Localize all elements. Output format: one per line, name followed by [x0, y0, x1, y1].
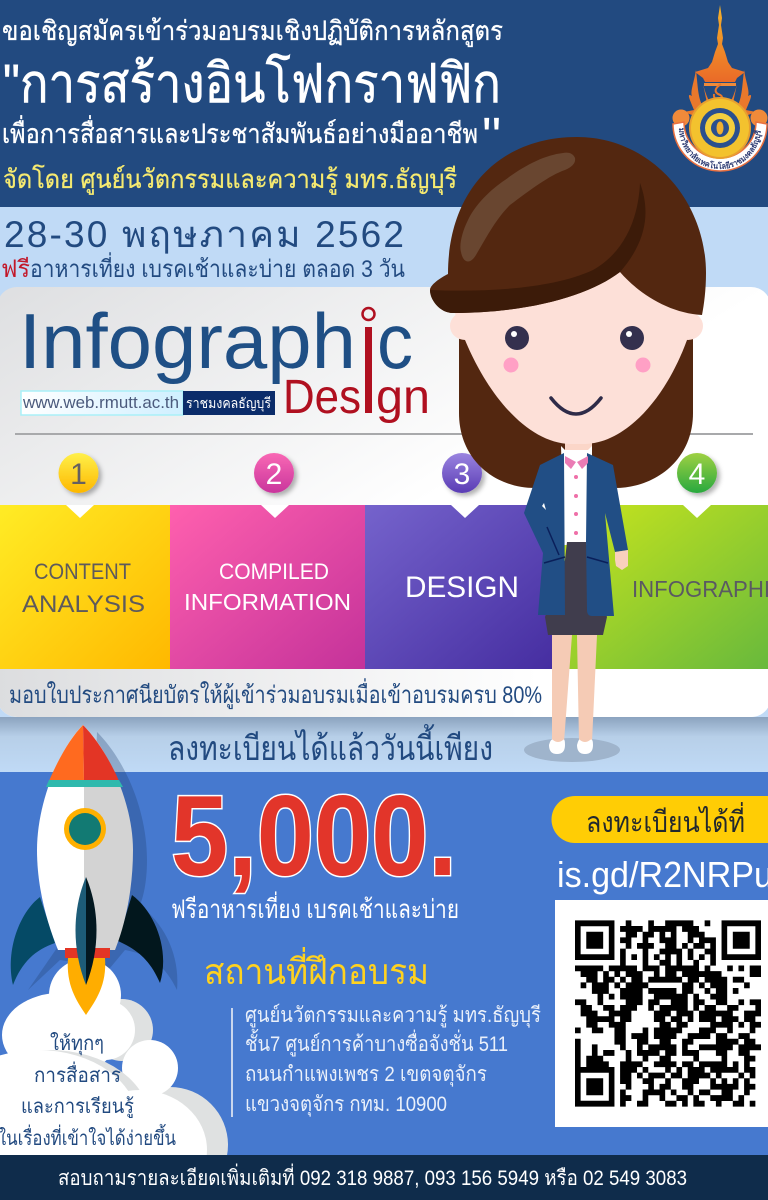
buttons [574, 475, 578, 535]
footer bar: สอบถามรายละเอียดเพิ่มเติมที่ 092 318 9887, 093 156 5949 หรือ 02 549 3083 [58, 1163, 687, 1190]
logo text: Infographic Design: gn [376, 371, 430, 424]
rocket body [37, 725, 133, 950]
illustration: woman character [430, 137, 706, 762]
hand [615, 550, 628, 570]
neck and shirt [561, 436, 592, 545]
cloud text: และการเรียนรู้ [21, 1096, 134, 1119]
panel: white card with process steps [0, 287, 768, 717]
logo: university emblem [672, 5, 768, 172]
header panel [0, 0, 768, 207]
badge 4 [677, 453, 717, 493]
venue address: แขวงจตุจักร กทม. 10900 [245, 1093, 447, 1117]
cloud text [0, 1032, 176, 1150]
title: course name: "การสร้างอินโฟกราฟฟิก [3, 53, 501, 114]
cloud text: การสื่อสาร [34, 1061, 121, 1087]
step 2: compiled information: INFORMATION [184, 589, 351, 615]
jacket [524, 453, 628, 616]
fringe shadow [430, 183, 645, 313]
price note: ฟรีอาหารเที่ยง เบรคเช้าและบ่าย [171, 891, 459, 924]
free meals line: ฟรี [1, 256, 30, 283]
rocket shadow [28, 732, 177, 990]
step 4: infographic [557, 453, 768, 669]
price: 5,000. [171, 773, 457, 900]
cheeks [504, 358, 650, 372]
website badge: www.web.rmutt.ac.th [22, 393, 179, 412]
logo text: Infographic Design [19, 297, 430, 424]
skirt [545, 542, 607, 635]
heading: invitation line: ขอเชิญสมัครเข้าร่วมอบรมเชิงปฏิบัติการหลักสูตร [2, 16, 503, 47]
badge 4: 4 [689, 458, 705, 491]
badge 2: 2 [266, 458, 282, 491]
registration heading: ลงทะเบียนได้แล้ววันนี้เพียง [168, 724, 493, 768]
flame [68, 958, 105, 1015]
venue heading: สถานที่ฝึกอบรม [204, 947, 429, 992]
badge 1: 1 [70, 458, 87, 491]
rocket window [64, 808, 106, 850]
step 1: content analysis: ANALYSIS [22, 591, 145, 618]
subtitle: course purpose: เพื่อการสื่อสารและประชาสัมพันธ์อย่างมืออาชีพ [2, 115, 478, 149]
venue address: ชั้น7 ศูนย์การค้าบางซื่อจังชั่น 511 [245, 1029, 508, 1057]
free meals line: อาหารเที่ยง เบรคเช้าและบ่าย ตลอด 3 วัน [30, 252, 405, 283]
smoke cloud [0, 959, 228, 1200]
registration pill: ลงทะเบียนได้ที่ [586, 802, 745, 839]
badge 3 [442, 453, 482, 493]
venue address: ศูนย์นวัตกรรมและความรู้ มทร.ธัญบุรี [245, 1003, 541, 1028]
date heading: 28-30 พฤษภาคม 2562 [4, 214, 404, 255]
logo text: Infographic Design: Infograph [19, 297, 356, 385]
certificate note: มอบใบประกาศนียบัตรให้ผู้เข้าร่วมอบรมเมื่อเข้าอบรมครบ 80% [9, 678, 542, 710]
logo text: Infographic Design: c [377, 297, 413, 385]
back hair [459, 320, 693, 488]
step 1: content analysis: CONTENT [34, 559, 131, 584]
website badge [21, 391, 275, 415]
organizer line: จัดโดย ศูนย์นวัตกรรมและความรู้ มทร.ธัญบุรี [3, 164, 457, 195]
cloud text: ในเรื่องที่เข้าใจได้ง่ายขึ้น [0, 1124, 176, 1150]
step 3: design: DESIGN [405, 571, 519, 604]
closing quotation mark: " [482, 107, 501, 167]
venue address: ถนนกำแพงเพชร 2 เขตจตุจักร [245, 1063, 487, 1087]
shoes [549, 740, 593, 754]
legs [552, 635, 597, 742]
logo: university emblem: มหาวิทยาลัยเทคโนโลยีราชมงคลธัญบุรี [678, 128, 763, 170]
smile [551, 398, 601, 414]
illustration: rocket and smoke cloud [0, 725, 228, 1200]
ears [450, 312, 703, 340]
center fin [76, 877, 96, 985]
collar [565, 456, 588, 469]
website badge: ราชมงคลธัญบุรี [186, 395, 271, 412]
footer bar [0, 1155, 768, 1200]
QR code [555, 900, 768, 1127]
badge 2 [254, 453, 294, 493]
badge 3: 3 [454, 458, 470, 491]
floor shadow [524, 738, 620, 762]
step 2: compiled information [170, 453, 365, 669]
logo text: Infographic Design: Des [283, 371, 361, 424]
step 2: compiled information: COMPILED [219, 559, 329, 584]
step 3: design [365, 453, 557, 669]
step 1: content analysis [0, 453, 170, 669]
venue address [231, 1003, 541, 1117]
face [450, 260, 700, 444]
eyes [505, 326, 644, 350]
cloud text: ให้ทุกๆ [50, 1032, 104, 1056]
fins [11, 895, 163, 985]
hair top with fringe [430, 137, 706, 315]
registration pill [552, 796, 768, 843]
exhaust band [65, 948, 110, 958]
hair highlight [460, 153, 575, 261]
badge 1 [58, 453, 98, 493]
